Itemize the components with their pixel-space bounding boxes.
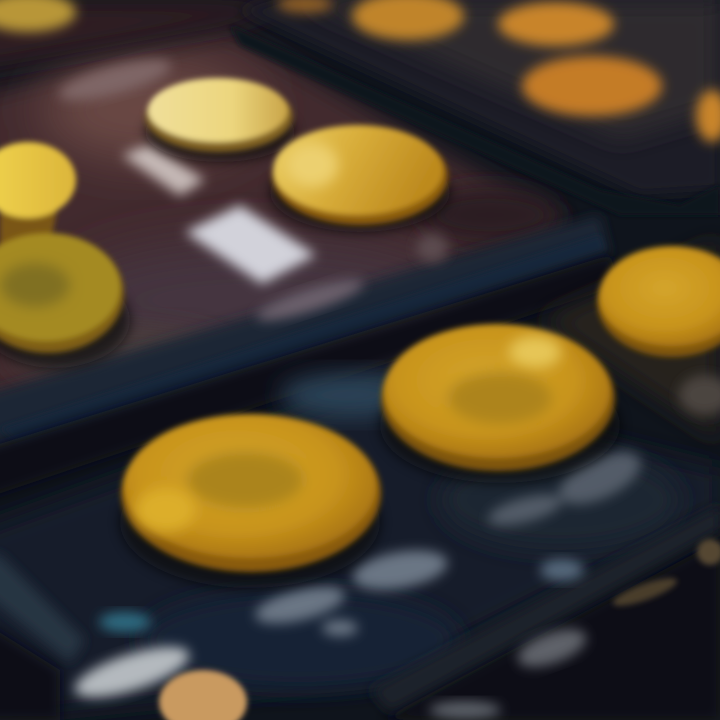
icon: coin shadow group	[0, 102, 620, 588]
icon: gold coin right edge	[597, 246, 720, 357]
highlight: white label centre	[185, 205, 316, 284]
highlight: blue glow bottom left	[99, 612, 151, 632]
icon: gold coin top centre pale	[145, 78, 293, 152]
highlight: amber label edge	[697, 539, 720, 565]
panel: upper tablet screen	[0, 0, 570, 420]
highlight: faint label right edge	[679, 375, 720, 415]
highlight: amber label right	[610, 573, 680, 611]
highlight: small label right	[540, 559, 584, 581]
tablet edge: diagonal dark blue frame	[0, 215, 620, 500]
highlight: grey chart lower screen	[252, 544, 450, 636]
icon: gold coin left lower	[0, 233, 124, 353]
highlight: pale chart upper left	[55, 51, 175, 109]
icon: gold coin upper centre	[272, 125, 448, 225]
icon: gold coin lower centre	[121, 414, 381, 572]
icon: orange coins top right	[0, 0, 720, 142]
highlight: white label bottom left	[69, 636, 195, 708]
icon: gold coin centre right	[381, 324, 615, 471]
highlight: white label upper	[122, 144, 205, 196]
highlight: bottom grey label	[429, 701, 501, 719]
highlight: grey chart middle	[253, 272, 367, 328]
icon: gold coin left top stack	[0, 142, 76, 250]
icon: gold coin bottom left	[159, 670, 247, 720]
panel: lower tablet screen	[0, 240, 720, 720]
highlight: grey marks middle	[416, 234, 448, 262]
panel: top right tablet	[230, 0, 720, 215]
highlight: grey label bottom right	[513, 622, 591, 674]
highlight: grey chart right	[485, 441, 648, 531]
